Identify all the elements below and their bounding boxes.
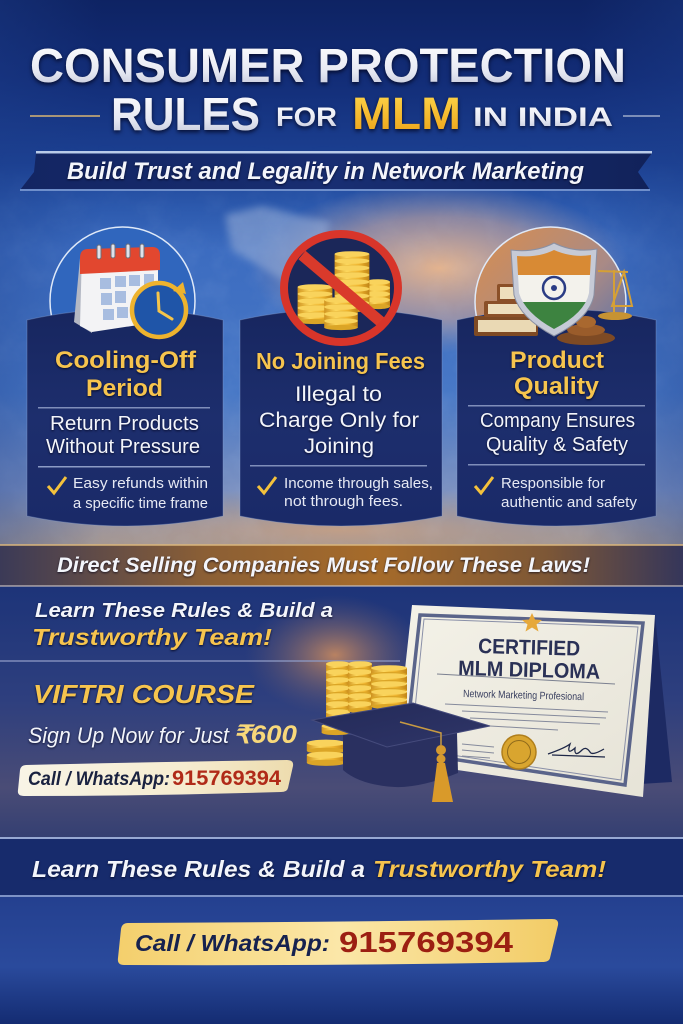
description: Company Ensures bbox=[480, 410, 635, 432]
certificate: MLM DIPLOMA bbox=[458, 657, 600, 684]
laws banner: Direct Selling Companies Must Follow These Laws! bbox=[57, 554, 590, 577]
check item: Easy refunds within bbox=[73, 475, 208, 492]
check item bbox=[258, 475, 433, 510]
coin stacks bbox=[307, 661, 407, 766]
course call to action bbox=[18, 600, 333, 796]
contact button bbox=[118, 919, 558, 965]
tagline: Trustworthy Team! bbox=[32, 624, 272, 650]
description bbox=[480, 410, 635, 456]
bottom tagline band bbox=[0, 837, 683, 897]
check item: a specific time frame bbox=[73, 495, 208, 512]
course section background bbox=[0, 587, 683, 838]
description: Illegal to bbox=[295, 383, 382, 406]
description: Quality & Safety bbox=[486, 434, 628, 456]
certificate: Network Marketing Profesional bbox=[463, 688, 584, 703]
title: MLM bbox=[352, 88, 461, 139]
subtitle ribbon: Build Trust and Legality in Network Marketing bbox=[67, 158, 584, 185]
check item: authentic and safety bbox=[501, 494, 638, 511]
title: RULES bbox=[111, 88, 260, 140]
bottom tagline band: Learn These Rules & Build a bbox=[32, 856, 365, 882]
description: Joining bbox=[304, 435, 374, 458]
price: Sign Up Now for Just bbox=[28, 723, 230, 748]
bottom tagline band: Trustworthy Team! bbox=[373, 856, 606, 882]
heading: Product bbox=[510, 347, 604, 374]
subtitle ribbon bbox=[20, 151, 652, 191]
certificate bbox=[395, 605, 655, 797]
heading: No Joining Fees bbox=[256, 348, 425, 374]
icon: calendar and clock bbox=[27, 227, 223, 526]
heading bbox=[55, 347, 197, 402]
contact button: Call / WhatsApp: bbox=[135, 930, 330, 956]
footer background bbox=[0, 897, 683, 1024]
certificate illustration bbox=[307, 605, 672, 802]
contact pill: 915769394 bbox=[172, 767, 281, 790]
check item bbox=[48, 475, 208, 512]
price bbox=[28, 721, 297, 749]
laws banner bbox=[0, 544, 683, 587]
check item: not through fees. bbox=[284, 493, 403, 510]
price: ₹600 bbox=[233, 721, 297, 749]
icon: shield, books and scales bbox=[474, 243, 632, 345]
signature bbox=[548, 744, 605, 757]
panel: product quality bbox=[457, 227, 656, 526]
icon: no coins symbol bbox=[284, 234, 398, 342]
certificate stand bbox=[640, 615, 672, 784]
course name: VIFTRI COURSE bbox=[33, 679, 255, 709]
check item: Responsible for bbox=[501, 475, 605, 492]
contact button: 915769394 bbox=[339, 927, 513, 959]
certificate: CERTIFIED bbox=[478, 635, 580, 661]
description bbox=[46, 413, 200, 458]
tagline bbox=[32, 600, 333, 650]
heading: Cooling-Off bbox=[55, 347, 197, 374]
heading: Quality bbox=[514, 373, 600, 400]
heading: Period bbox=[86, 375, 163, 402]
title: CONSUMER PROTECTION bbox=[30, 40, 626, 93]
title bbox=[30, 40, 660, 140]
contact pill: Call / WhatsApp: bbox=[28, 769, 170, 790]
tagline: Learn These Rules & Build a bbox=[35, 600, 333, 622]
description: Return Products bbox=[50, 413, 199, 435]
graduation cap bbox=[312, 703, 490, 802]
description bbox=[259, 383, 419, 458]
description: Charge Only for bbox=[259, 409, 419, 432]
description: Without Pressure bbox=[46, 436, 200, 458]
star bbox=[522, 613, 542, 632]
page background bbox=[0, 0, 683, 572]
title: FOR bbox=[276, 102, 337, 132]
panel: cooling-off period bbox=[27, 227, 223, 526]
title: IN INDIA bbox=[473, 102, 613, 132]
check item bbox=[475, 475, 638, 511]
heading bbox=[510, 347, 604, 400]
gold seal bbox=[502, 735, 536, 769]
panel: no joining fees bbox=[240, 234, 442, 526]
contact pill bbox=[18, 760, 293, 796]
check item: Income through sales, bbox=[284, 475, 433, 492]
